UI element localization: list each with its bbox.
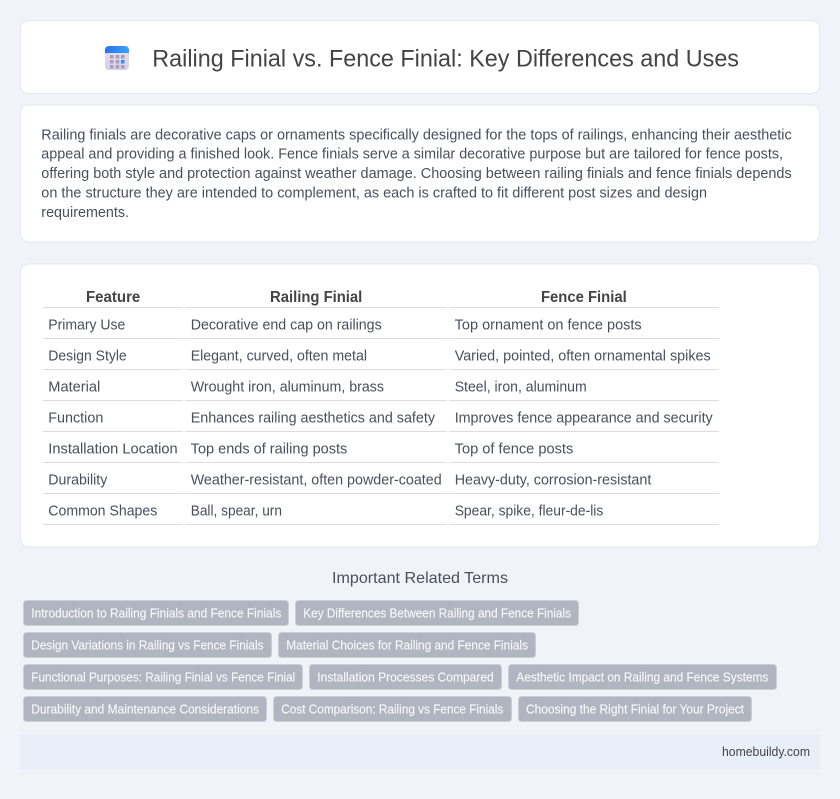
tag xyxy=(278,632,536,658)
tag: Material Choices for Railing and Fence Finials xyxy=(286,638,528,652)
row: durability: Weather-resistant, often powder-coated xyxy=(191,472,442,488)
row: common shapes: Ball, spear, urn xyxy=(191,503,282,519)
row: common shapes: Spear, spike, fleur-de-lis xyxy=(455,503,603,519)
row: material: Wrought iron, aluminum, brass xyxy=(191,379,384,395)
table header: Fence Finial xyxy=(541,289,627,306)
tag xyxy=(24,664,302,690)
row: durability xyxy=(48,472,651,488)
tag: Introduction to Railing Finials and Fence Finials xyxy=(31,606,281,620)
title: Railing Finial vs. Fence Finial: Key Differences and Uses xyxy=(152,46,739,73)
tag xyxy=(24,696,266,722)
row: durability: Heavy-duty, corrosion-resistant xyxy=(455,472,651,488)
intro paragraph: offering both style and protection against weather damage. Choosing between railing finials and fence finials depends xyxy=(41,166,792,182)
row: installation location xyxy=(48,441,573,457)
tag: Design Variations in Railing vs Fence Finials xyxy=(31,638,263,652)
footer source text: homebuildy.com xyxy=(722,745,810,759)
row: installation location: Top ends of railing posts xyxy=(191,441,347,457)
row: installation location: Top of fence posts xyxy=(455,441,573,457)
row: material: Steel, iron, aluminum xyxy=(455,379,587,395)
footer xyxy=(20,735,820,769)
tag: Aesthetic Impact on Railing and Fence Systems xyxy=(516,670,768,684)
row: design style: Design Style xyxy=(48,348,127,364)
row: installation location: Installation Location xyxy=(48,441,178,457)
row: material xyxy=(48,379,587,395)
intro paragraph: on the structure they are intended to complement, as each is crafted to fit different post sizes and design xyxy=(41,186,707,202)
row: design style xyxy=(48,348,711,364)
intro paragraph: appeal and providing a finished look. Fence finials serve a similar decorative purpose but are tailored for fence posts, xyxy=(41,147,783,163)
tag: Functional Purposes: Railing Finial vs Fence Finial xyxy=(31,670,295,684)
icon: calendar xyxy=(105,46,129,70)
tag: Key Differences Between Railing and Fence Finials xyxy=(303,606,571,620)
tag: Cost Comparison: Railing vs Fence Finials xyxy=(281,702,503,716)
row: function xyxy=(48,410,713,426)
panel: comparison table xyxy=(20,264,820,547)
tag xyxy=(518,696,752,722)
tag xyxy=(296,600,578,626)
row: function: Improves fence appearance and security xyxy=(455,410,713,426)
heading: important related terms: Important Related Terms xyxy=(332,570,508,587)
row: common shapes xyxy=(48,503,603,519)
tag xyxy=(24,632,272,658)
row: design style: Varied, pointed, often ornamental spikes xyxy=(455,348,711,364)
tag: Installation Processes Compared xyxy=(317,670,494,684)
panel: header xyxy=(20,20,820,94)
panel: introduction xyxy=(20,105,820,242)
tag: Durability and Maintenance Considerations xyxy=(31,702,259,716)
tag: Choosing the Right Finial for Your Project xyxy=(526,702,744,716)
tag xyxy=(24,600,288,626)
tag xyxy=(274,696,512,722)
intro paragraph: Railing finials are decorative caps or ornaments specifically designed for the tops of railings, enhancing their aesthetic xyxy=(41,127,792,143)
row: durability: Durability xyxy=(48,472,108,488)
tag xyxy=(310,664,502,690)
row: primary use xyxy=(48,317,642,333)
row: design style: Elegant, curved, often metal xyxy=(191,348,367,364)
row: primary use: Primary Use xyxy=(48,317,125,333)
row: function: Enhances railing aesthetics and safety xyxy=(191,410,436,426)
row: primary use: Decorative end cap on railings xyxy=(191,317,382,333)
intro paragraph xyxy=(41,127,792,221)
row: primary use: Top ornament on fence posts xyxy=(455,317,642,333)
row: common shapes: Common Shapes xyxy=(48,503,157,519)
row: material: Material xyxy=(48,379,100,395)
related terms tags xyxy=(24,600,776,722)
tag xyxy=(508,664,776,690)
table header xyxy=(86,289,627,306)
intro paragraph: requirements. xyxy=(41,205,129,221)
row: function: Function xyxy=(48,410,103,426)
table header: Feature xyxy=(86,289,141,306)
table header: Railing Finial xyxy=(270,289,362,306)
